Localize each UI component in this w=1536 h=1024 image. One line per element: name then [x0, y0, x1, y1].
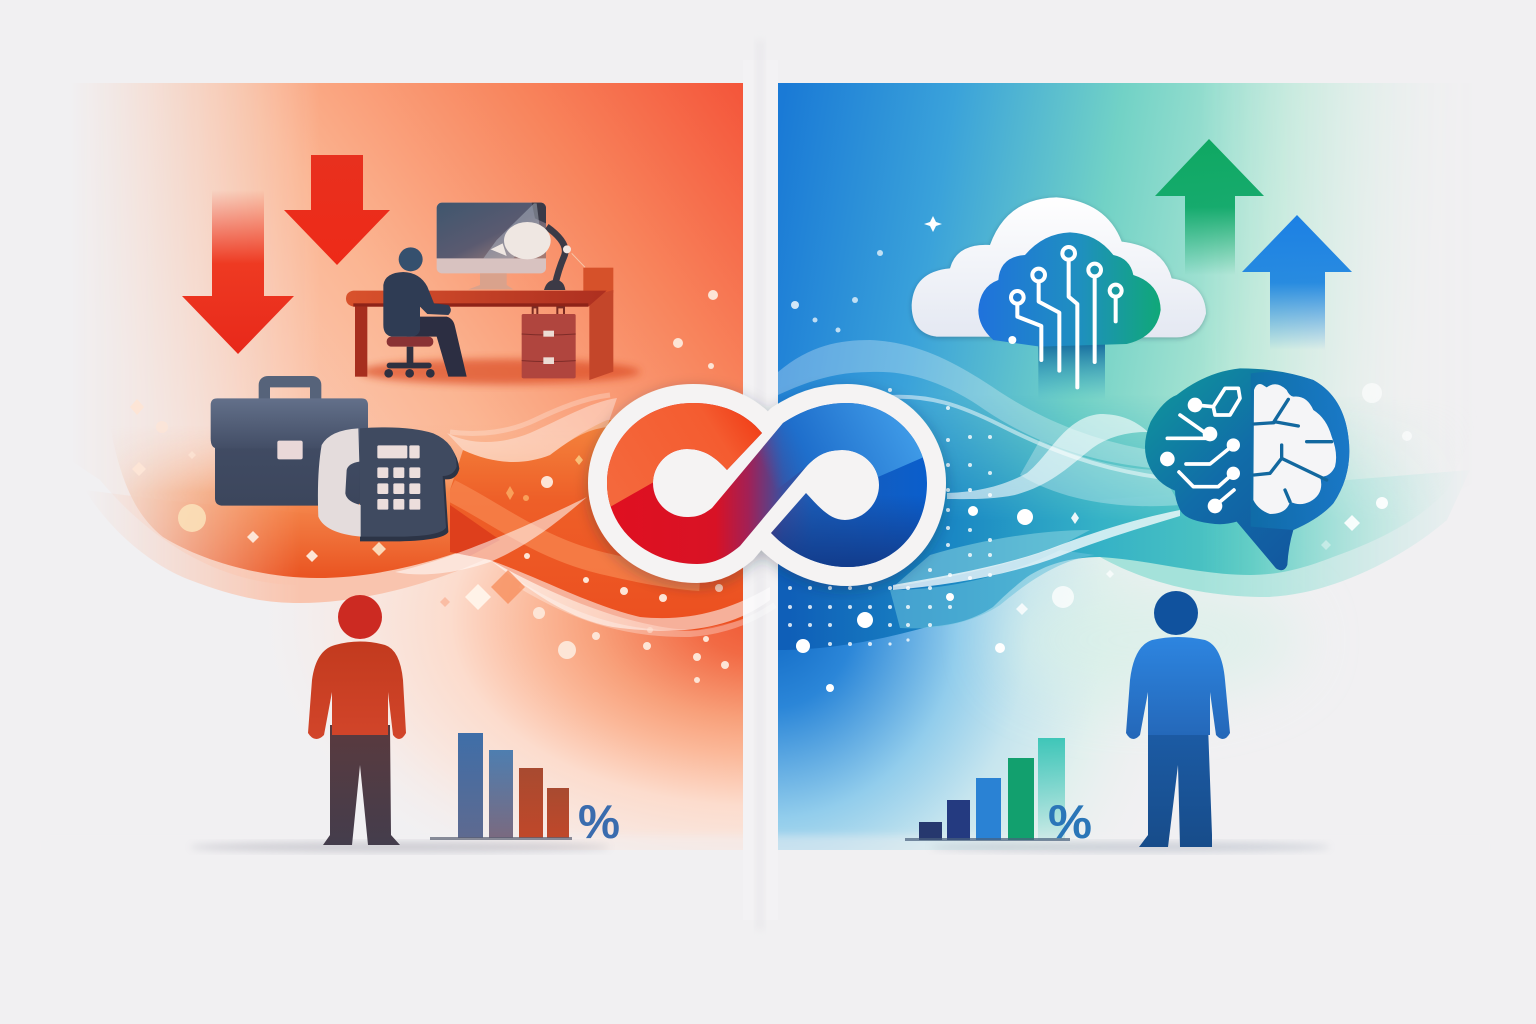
particles: left	[130, 290, 729, 683]
waves: left flow	[395, 395, 775, 634]
logo light blue highlight	[745, 403, 927, 495]
figure: red person	[308, 595, 406, 845]
logo colour band	[607, 403, 927, 567]
percent sign left: %	[578, 795, 620, 848]
desk floor shadow	[360, 359, 640, 384]
icon: office desk with worker	[346, 203, 640, 384]
logo orange highlight	[607, 403, 762, 545]
cloud stem	[1038, 342, 1105, 400]
centre divider	[743, 40, 778, 930]
desk	[346, 290, 613, 380]
telephone	[318, 427, 459, 541]
top colour field	[778, 83, 1395, 510]
white cloud	[912, 197, 1206, 337]
logo: infinity symbol	[607, 403, 927, 567]
icon: red down arrow	[284, 155, 390, 265]
pale teal glow	[1000, 580, 1300, 700]
panel: right blue background	[770, 83, 1498, 865]
red briefcase	[522, 307, 576, 378]
percent sign right: %	[1048, 795, 1092, 848]
ground shadow right	[930, 842, 1330, 852]
icon: AI cloud	[912, 197, 1206, 400]
lobe grooves	[1254, 399, 1332, 502]
brain circuits	[1167, 388, 1240, 506]
bar chart: rising	[905, 738, 1070, 841]
icon: short red down arrow	[182, 190, 294, 354]
particles: right	[788, 216, 1412, 692]
saturated wave	[118, 437, 546, 578]
pale wave edge	[110, 494, 485, 603]
orange flow area	[450, 420, 743, 630]
icon: briefcase and telephone	[211, 382, 459, 541]
pale teal wave edge	[1100, 470, 1470, 597]
infographic canvas	[96, 83, 1454, 855]
icon: blue up arrow	[1242, 215, 1352, 350]
circuit traces	[1011, 247, 1122, 387]
monitor	[437, 203, 546, 289]
coloured inner cloud	[978, 232, 1161, 347]
icon: green up arrow	[1155, 139, 1264, 275]
ground fade	[770, 835, 1490, 865]
office chair	[384, 337, 435, 378]
saturated wave	[778, 380, 1498, 650]
seated worker	[383, 247, 467, 377]
brain silhouette	[1145, 368, 1349, 570]
logo white outline	[607, 403, 927, 567]
top colour field	[40, 83, 743, 585]
desk lamp	[491, 222, 585, 290]
white lobes	[1253, 384, 1336, 514]
figure: blue person	[1126, 591, 1230, 847]
lower right glow	[327, 559, 743, 850]
ground fade	[639, 838, 743, 850]
icon: AI brain	[1145, 368, 1349, 570]
briefcase	[211, 382, 368, 506]
logo navy shading	[771, 483, 927, 567]
waves: right flow	[778, 340, 1180, 628]
bar chart: declining	[430, 733, 572, 840]
panel: left red background	[96, 83, 743, 850]
ground shadow left	[190, 842, 610, 852]
lower left glow	[778, 557, 1120, 850]
desk box	[583, 268, 613, 293]
